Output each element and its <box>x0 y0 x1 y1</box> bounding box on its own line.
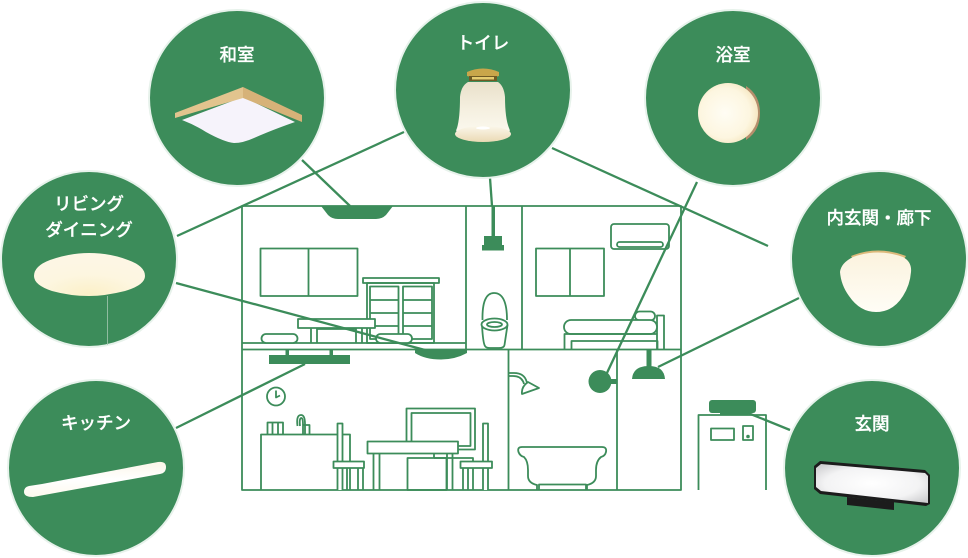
lamp: kitchen <box>269 350 350 364</box>
label: japanese room: 和室 <box>220 45 254 65</box>
label: hallway: 内玄関・廊下 <box>826 208 932 228</box>
circle: toilet <box>395 2 571 178</box>
label: living dining: ダイニング <box>45 220 133 240</box>
product: square ceiling light <box>175 87 302 143</box>
circle: bathroom <box>645 10 821 186</box>
connector lines and roof <box>176 132 799 430</box>
label: bathroom: 浴室 <box>716 45 750 65</box>
circle: kitchen <box>8 380 184 556</box>
lamp: hallway <box>632 350 665 379</box>
label: kitchen: キッチン <box>61 413 131 433</box>
lamp: japanese room ceiling <box>321 206 393 219</box>
product: round ceiling light <box>34 253 145 345</box>
circle: japanese room <box>149 10 325 186</box>
label: toilet: トイレ <box>457 33 509 53</box>
upper right room: bedroom <box>536 224 669 349</box>
label: entrance: 玄関 <box>854 414 890 434</box>
house structure <box>242 206 681 490</box>
circle: living dining <box>1 171 177 347</box>
label: living dining: リビング <box>54 194 124 214</box>
product: glass shade light <box>455 68 511 142</box>
product: entrance light <box>814 461 930 510</box>
product: globe wall light <box>698 83 760 143</box>
toilet room fixtures <box>482 206 508 348</box>
bathroom fixtures <box>509 370 618 490</box>
circle: entrance <box>784 380 960 556</box>
kitchen and dining <box>261 388 492 490</box>
lamp: living room <box>415 350 467 360</box>
label: living dining <box>45 194 133 240</box>
circle: hallway <box>791 171 967 347</box>
entrance wall <box>698 400 766 490</box>
product: linear light <box>24 462 166 497</box>
product: dome light <box>840 250 911 312</box>
upper left room: japanese room <box>260 248 439 343</box>
